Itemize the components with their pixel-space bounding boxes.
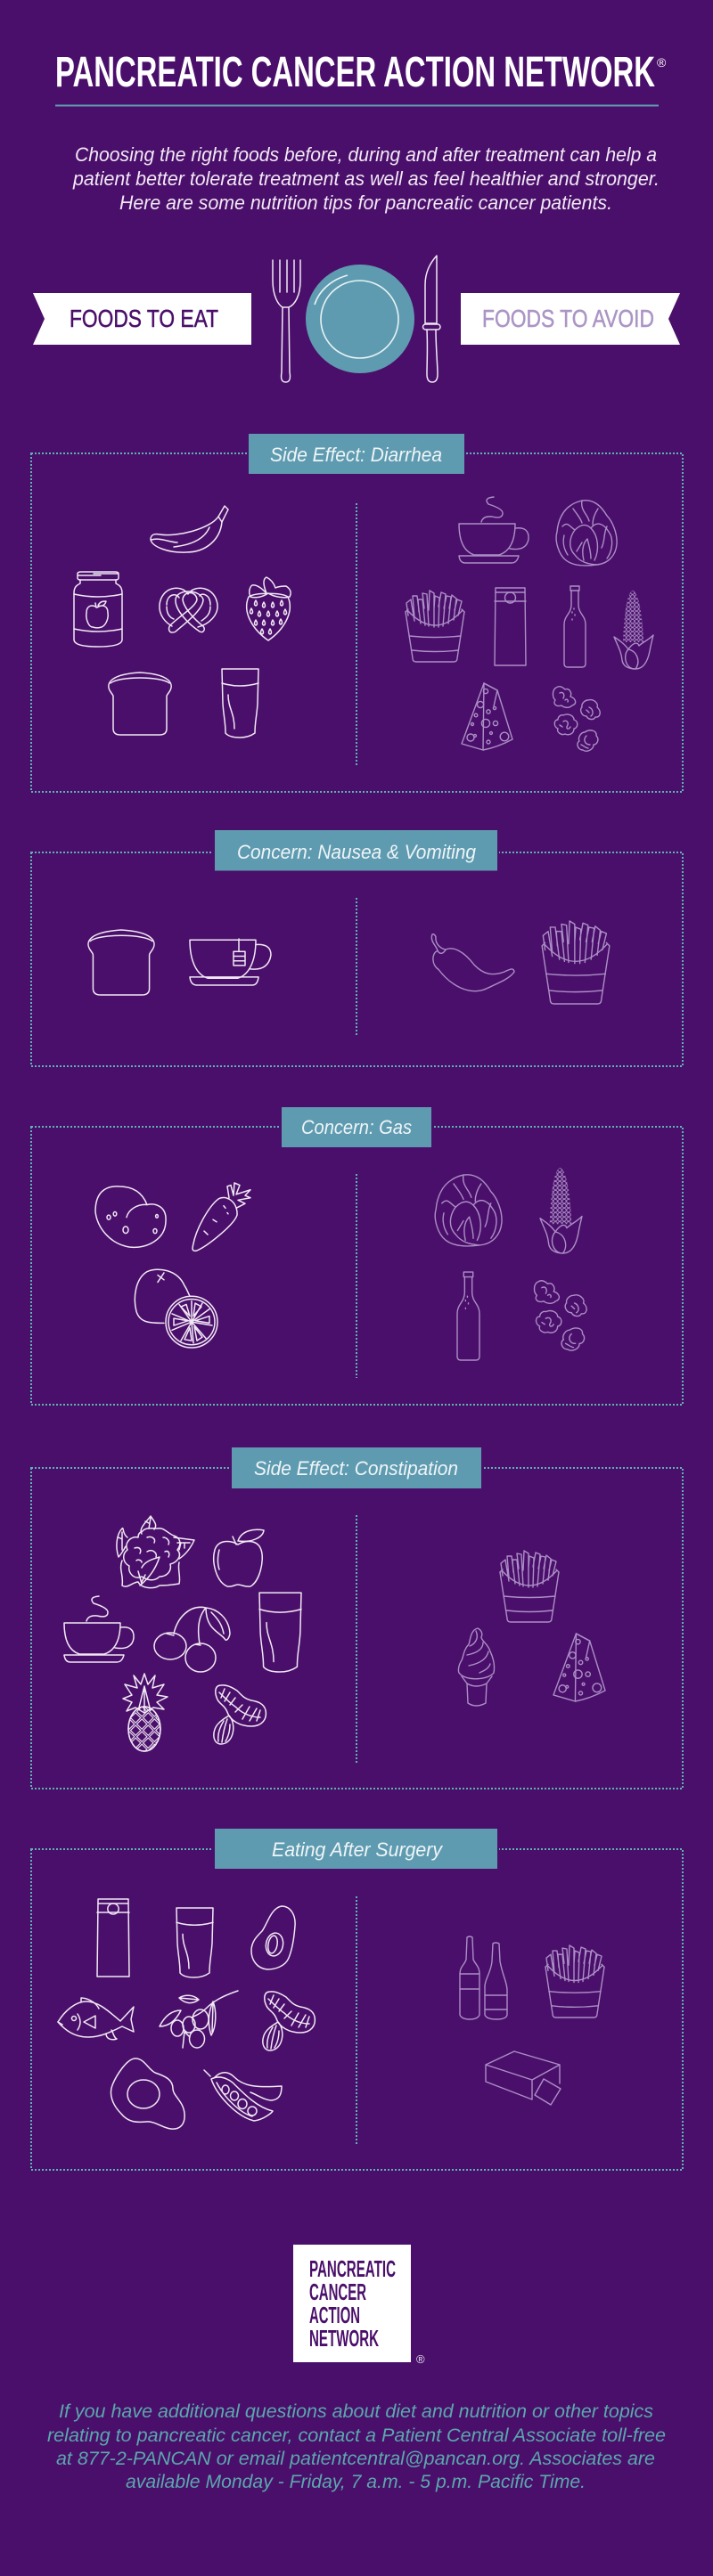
icon: cabbage [435, 1175, 502, 1246]
icon: glass [222, 669, 258, 738]
foods to avoid icons: nausea [431, 921, 610, 1004]
foods to avoid icons: diarrhea [406, 497, 653, 751]
icon: fries [406, 591, 464, 662]
icon: ice cream [458, 1628, 495, 1706]
footer contact text: relating to pancreatic cancer, contact a Patient Central Associate toll-free [47, 2425, 666, 2446]
icon: cabbage [556, 501, 617, 566]
icon: coffee cup [459, 497, 529, 563]
icon: fish [58, 1998, 134, 2040]
heading: eating after surgery: Eating After Surgery [272, 1838, 444, 1861]
logo: ® [416, 2352, 425, 2366]
panel: concern nausea and vomiting [31, 829, 683, 1066]
icon: pineapple [123, 1674, 168, 1751]
panel: eating after surgery [31, 1828, 683, 2170]
heading: concern gas: Concern: Gas [301, 1116, 412, 1138]
icon: wine bottles [460, 1936, 507, 2019]
ribbon: foods to eat: FOODS TO EAT [70, 305, 218, 332]
icon: nuts [263, 1992, 315, 2050]
panel: side effect diarrhea [31, 433, 683, 792]
ribbon: foods to eat [33, 293, 251, 345]
foods to eat icons: nausea [88, 930, 271, 995]
icon: bottle [564, 586, 586, 667]
icon: bread [109, 673, 171, 735]
icon: peas [204, 2070, 282, 2121]
intro text: Here are some nutrition tips for pancreatic cancer patients. [119, 192, 612, 214]
icon: corn [614, 591, 653, 669]
intro text [72, 143, 660, 214]
foods to eat icons: constipation [64, 1516, 301, 1751]
icon: tea cup [190, 939, 271, 985]
foods to avoid icons: gas [435, 1168, 586, 1360]
icon: fries [500, 1551, 559, 1622]
intro text: patient better tolerate treatment as well as feel healthier and stronger. [72, 167, 660, 190]
intro text: Choosing the right foods before, during and after treatment can help a [75, 143, 657, 166]
panel: side effect constipation [31, 1447, 683, 1789]
heading: eating after surgery [214, 1828, 498, 1870]
logo [293, 2245, 425, 2366]
icon: banana [151, 506, 228, 552]
icon: cherries [154, 1607, 230, 1672]
icon: coffee cup [64, 1596, 134, 1662]
icon: chili pepper [431, 934, 514, 991]
icon: applesauce jar [74, 572, 122, 647]
icon: cheese [553, 1634, 605, 1701]
icon: glass [176, 1908, 213, 1977]
heading: side effect diarrhea [248, 433, 465, 475]
icon: potato [95, 1186, 166, 1247]
foods to avoid icons: constipation [458, 1551, 605, 1706]
icon: orange [135, 1269, 217, 1348]
icon: cheese [462, 683, 512, 750]
icon: milk carton [495, 588, 526, 665]
icon: olives [160, 1991, 238, 2048]
heading: constipation: Side Effect: Constipation [254, 1457, 458, 1480]
icon: bottle [457, 1272, 479, 1360]
footer contact text [47, 2401, 666, 2492]
icon: butter [486, 2051, 561, 2105]
footer contact text: available Monday - Friday, 7 a.m. - 5 p.m. Pacific Time. [126, 2472, 586, 2492]
foods to eat icons: gas [95, 1183, 250, 1348]
heading: nausea and vomiting [214, 829, 498, 871]
ribbon: foods to avoid: FOODS TO AVOID [482, 305, 654, 332]
panel: concern gas [31, 1106, 683, 1405]
foods to eat icons: after surgery [58, 1899, 315, 2129]
icon: fries [542, 921, 610, 1004]
icon: bread [88, 930, 154, 995]
heading: constipation [231, 1447, 482, 1489]
heading: concern gas [281, 1106, 432, 1148]
icon: glass [259, 1593, 301, 1672]
foods to avoid icons: after surgery [460, 1936, 604, 2105]
icon: plate [306, 265, 414, 373]
icon: cauliflower [117, 1516, 194, 1588]
icon: apple [214, 1529, 264, 1586]
icon: popcorn [553, 687, 600, 751]
icon: popcorn [535, 1281, 586, 1350]
logo: PANCREATIC [309, 2255, 396, 2282]
icon: corn [540, 1168, 582, 1253]
icon: pretzel [160, 588, 217, 632]
logo: CANCER [309, 2278, 366, 2305]
icon: carrot [193, 1183, 250, 1251]
icon: fried egg [111, 2058, 184, 2129]
icon: strawberry [247, 577, 291, 640]
icon: milk carton [97, 1899, 129, 1977]
footer contact text: at 877-2-PANCAN or email patientcentral@pancan.org. Associates are [56, 2449, 655, 2469]
heading: nausea and vomiting: Concern: Nausea & Vomiting [237, 841, 477, 863]
logo: NETWORK [309, 2325, 379, 2352]
ribbon: foods to avoid [461, 293, 680, 345]
icon: knife [422, 256, 440, 382]
title: ® [657, 55, 667, 69]
foods to eat icons: diarrhea [74, 506, 291, 738]
heading: side effect diarrhea: Side Effect: Diarrhea [270, 444, 442, 466]
footer contact text: If you have additional questions about diet and nutrition or other topics [59, 2401, 654, 2422]
icon: fries [545, 1945, 604, 2018]
icon: fork [273, 260, 300, 382]
logo: ACTION [309, 2302, 360, 2328]
icon: avocado [251, 1906, 295, 1969]
icon: nuts [214, 1685, 266, 1744]
